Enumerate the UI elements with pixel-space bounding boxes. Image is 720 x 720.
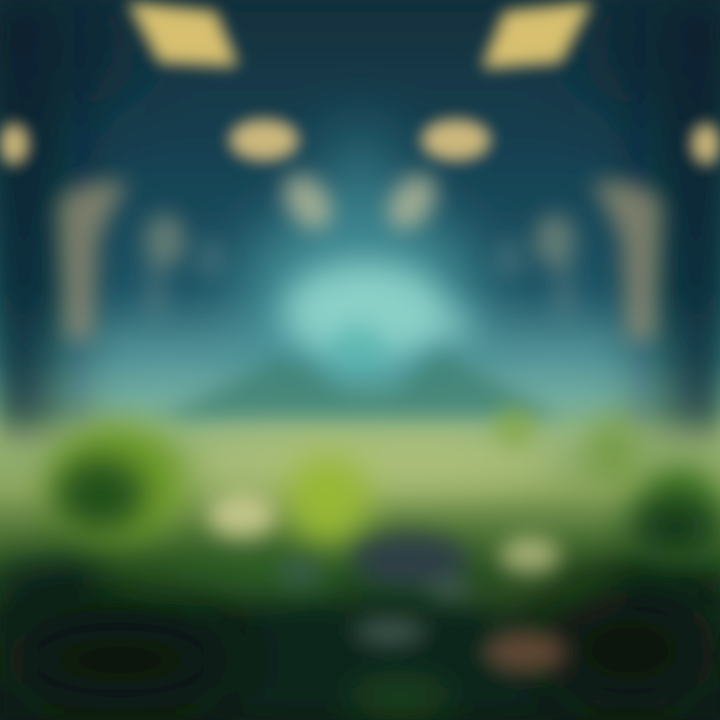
mountains <box>160 350 560 418</box>
dark upper corners <box>2 3 718 107</box>
angled light beams <box>274 166 446 238</box>
tree: far right <box>640 466 720 554</box>
bush: right small <box>493 408 537 448</box>
tree: right <box>586 418 638 486</box>
glowing orb <box>283 262 475 362</box>
dark foreground <box>0 553 720 720</box>
left and right light columns <box>58 181 662 340</box>
dark rocks centre <box>278 532 474 602</box>
tree shadow: far right <box>630 496 720 560</box>
top ceiling lights <box>128 2 592 68</box>
right side shading <box>610 0 720 430</box>
foreground shadows <box>0 590 720 710</box>
trees and bushes <box>50 408 720 560</box>
green meadow <box>180 432 560 492</box>
tree shadow: left <box>54 457 146 533</box>
orb core <box>328 324 388 376</box>
central glow <box>60 120 660 400</box>
glowing ground patches <box>208 494 567 674</box>
middle lights <box>0 120 720 164</box>
tree: left <box>50 424 186 540</box>
bush: centre <box>286 456 370 544</box>
left side shading <box>0 0 110 430</box>
